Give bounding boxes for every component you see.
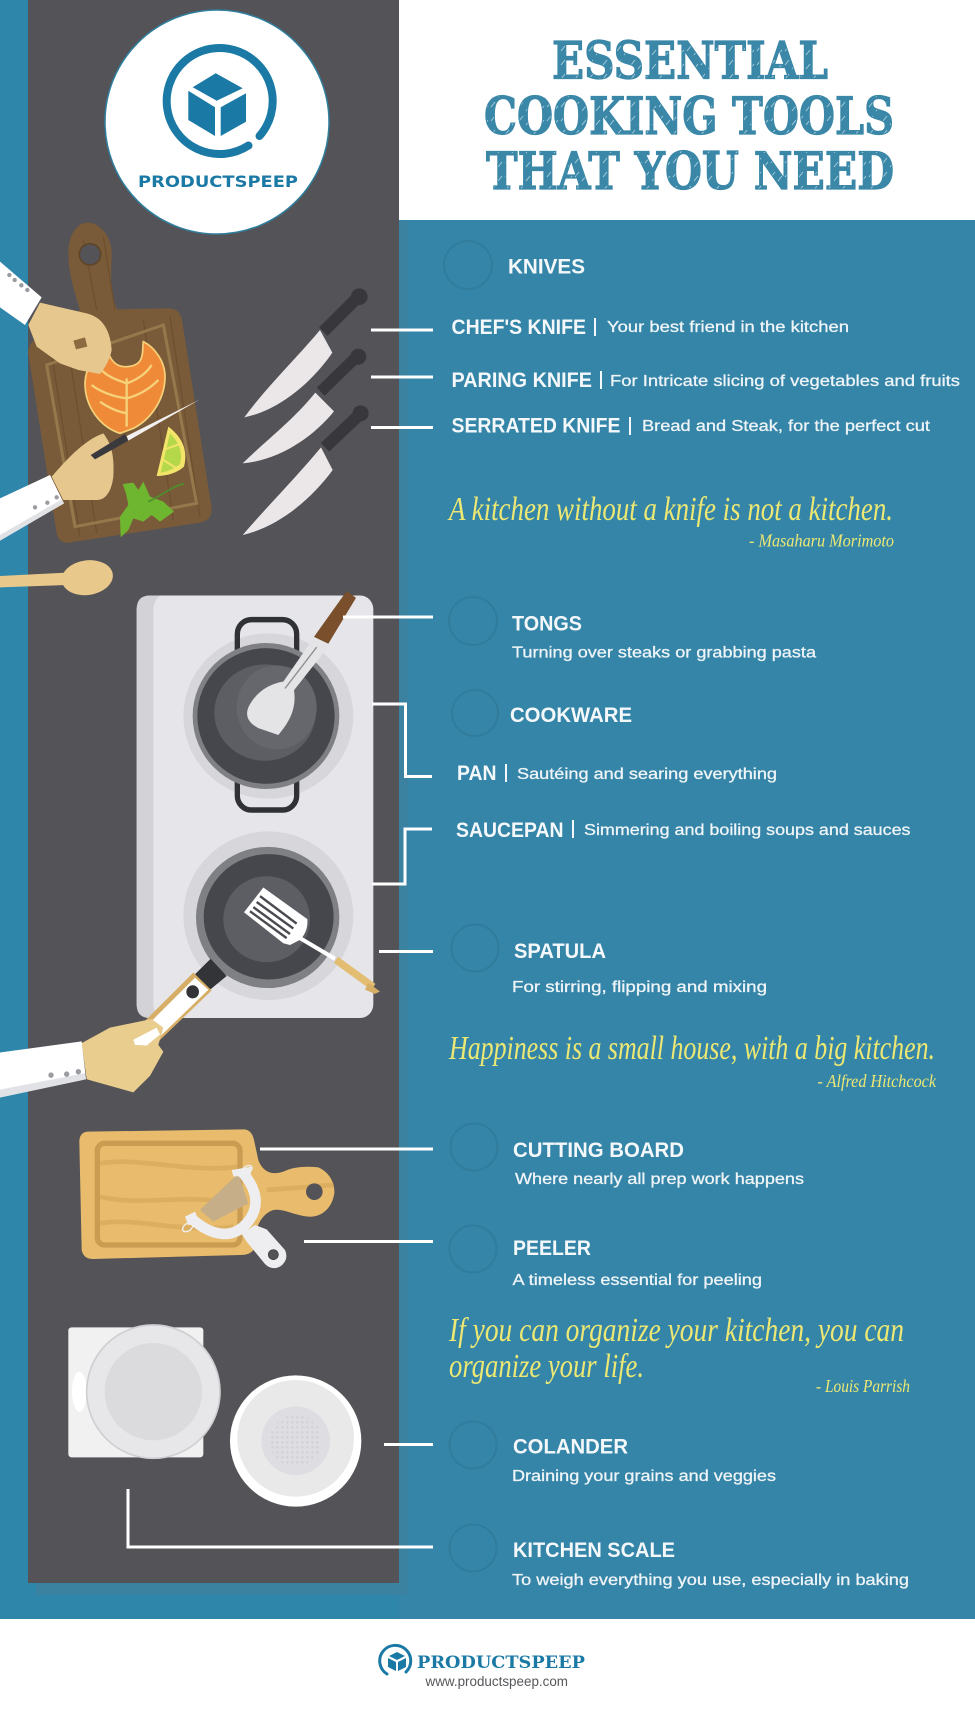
illustration: chef's knife	[244, 288, 368, 417]
dark work surface panel	[28, 0, 399, 1583]
title	[484, 32, 894, 202]
leader line: colander	[384, 1443, 433, 1446]
quote: Louis Parrish: - Louis Parrish	[816, 1376, 910, 1396]
footer logo: www.productspeep.com	[425, 1674, 568, 1689]
section: cutting board: Where nearly all prep work happens	[515, 1171, 804, 1188]
section: knives: PARING KNIFE	[452, 369, 592, 392]
section: peeler: PEELER	[513, 1237, 591, 1260]
white title panel	[399, 0, 975, 220]
leader line: paring knife	[371, 376, 433, 378]
quote: Alfred Hitchcock: - Alfred Hitchcock	[818, 1071, 937, 1091]
section: cutting board	[450, 1124, 804, 1188]
section: cookware: PAN	[457, 762, 496, 785]
footer logo: PRODUCTSPEEP	[417, 1653, 585, 1673]
section: spatula: SPATULA	[514, 940, 606, 963]
leader line: serrated knife	[371, 426, 433, 429]
section: kitchen scale: To weigh everything you use, especially in baking	[512, 1572, 909, 1589]
illustration: colander	[230, 1375, 361, 1507]
section: tongs: Turning over steaks or grabbing pasta	[512, 644, 816, 662]
section: cookware	[452, 690, 910, 842]
quote: Masaharu Morimoto	[447, 491, 894, 550]
leader line: cutting board	[260, 1148, 433, 1150]
section: cutting board: CUTTING BOARD	[513, 1139, 684, 1162]
section: kitchen scale	[450, 1524, 909, 1589]
quote: Louis Parrish	[448, 1312, 910, 1396]
section: tongs: TONGS	[512, 612, 582, 636]
section: colander: COLANDER	[513, 1436, 628, 1458]
section: cookware: COOKWARE	[510, 704, 632, 727]
leader line: saucepan	[372, 829, 432, 884]
section: spatula	[452, 924, 767, 996]
illustration: spatula	[244, 888, 380, 994]
section: knives: SERRATED KNIFE	[452, 414, 620, 438]
section: peeler: A timeless essential for peeling	[512, 1272, 762, 1289]
illustration: wooden spoon	[0, 557, 115, 598]
leader line: kitchen scale	[128, 1489, 433, 1547]
illustration: kitchen scale	[68, 1325, 220, 1458]
leader line: chef's knife	[371, 328, 433, 332]
illustration: cutting board	[79, 1129, 334, 1259]
quote: Louis Parrish: organize your life.	[449, 1348, 644, 1385]
illustration: paring knife	[243, 349, 366, 463]
title: ESSENTIAL	[552, 32, 828, 92]
section: knives: CHEF'S KNIFE	[452, 316, 586, 339]
section: knives: Bread and Steak, for the perfect cut	[642, 418, 931, 435]
illustration: tongs	[247, 591, 356, 735]
logo badge	[105, 10, 329, 234]
section: knives: For Intricate slicing of vegetables and fruits	[610, 373, 960, 390]
illustration: serrated knife	[243, 405, 369, 535]
section: spatula: For stirring, flipping and mixing	[512, 979, 767, 996]
section: knives: KNIVES	[508, 256, 585, 278]
section: colander	[450, 1422, 776, 1485]
section: cookware: Simmering and boiling soups and sauces	[584, 822, 910, 839]
leader line: pan	[372, 704, 432, 776]
title: THAT YOU NEED	[486, 142, 894, 202]
section: peeler	[450, 1226, 762, 1289]
section: cookware: SAUCEPAN	[456, 819, 564, 842]
leader line: spatula	[379, 950, 433, 953]
section: kitchen scale: KITCHEN SCALE	[513, 1539, 675, 1562]
illustration: stove with pot, tongs, pan and spatula	[137, 595, 373, 1018]
leader line: peeler	[304, 1240, 433, 1243]
illustration: frying pan with hand	[0, 959, 227, 1098]
section: tongs	[449, 597, 816, 662]
illustration: peeler	[181, 1164, 286, 1268]
quote: Masaharu Morimoto: - Masaharu Morimoto	[749, 530, 894, 550]
footer logo	[380, 1645, 585, 1689]
section: colander: Draining your grains and veggies	[512, 1468, 776, 1485]
illustration: cutting board with hands, salmon, lime and parsley	[0, 223, 212, 543]
section: knives	[444, 241, 960, 438]
quote: Alfred Hitchcock	[448, 1030, 937, 1091]
leader line: tongs	[343, 616, 433, 618]
logo badge: PRODUCTSPEEP	[138, 172, 298, 191]
title: COOKING TOOLS	[484, 87, 894, 147]
section: knives: Your best friend in the kitchen	[607, 319, 849, 336]
section: cookware: Sautéing and searing everything	[517, 766, 777, 783]
